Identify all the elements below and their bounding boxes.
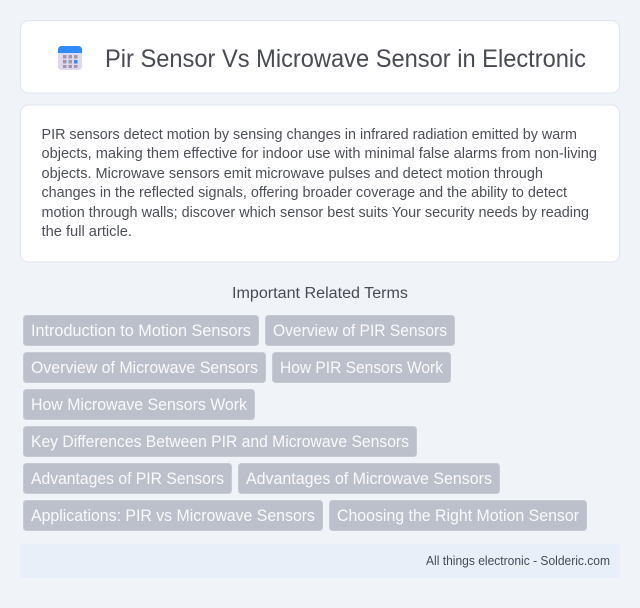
- tag: introduction: [24, 316, 258, 346]
- tag: overview of microwave: Overview of Microwave Sensors: [31, 358, 258, 377]
- tag: advantages of PIR: [24, 464, 232, 494]
- tag: advantages of PIR: Advantages of PIR Sensors: [31, 469, 224, 488]
- heading: related terms: Important Related Terms: [232, 285, 408, 302]
- tag: overview of PIR: Overview of PIR Sensors: [273, 321, 447, 340]
- text block: summary paragraph: objects, making them effective for indoor use with minimal false alarms from non-living: [42, 146, 597, 162]
- title: Pir Sensor Vs Microwave Sensor in Electronic: [105, 45, 586, 73]
- text block: summary paragraph: [42, 127, 597, 240]
- panel: related term tags: [24, 316, 586, 530]
- footer: All things electronic - Solderic.com: [426, 554, 610, 568]
- tag: introduction: Introduction to Motion Sensors: [31, 321, 251, 340]
- tag: how microwave works: [24, 390, 254, 420]
- tag: overview of PIR: [266, 316, 454, 346]
- tag: applications: [24, 500, 322, 530]
- text block: summary paragraph: objects. Microwave sensors emit microwave pulses and detect motion through: [42, 166, 543, 182]
- tag: choosing: Choosing the Right Motion Sensor: [337, 506, 579, 525]
- text block: summary paragraph: the full article.: [42, 224, 132, 240]
- tag: how PIR works: How PIR Sensors Work: [280, 358, 444, 377]
- tag: choosing: [330, 500, 586, 530]
- text block: summary paragraph: motion through walls; discover which sensor best suits Your security needs by reading: [42, 205, 589, 221]
- tag: key differences: [24, 426, 416, 456]
- panel: summary: [20, 105, 620, 262]
- tag: key differences: Key Differences Between PIR and Microwave Sensors: [31, 432, 409, 451]
- tag: advantages of microwave: Advantages of Microwave Sensors: [246, 469, 492, 488]
- tag: advantages of microwave: [238, 464, 500, 494]
- icon: calendar: [58, 46, 82, 70]
- panel: title header: [20, 20, 620, 93]
- tag: how PIR works: [272, 352, 450, 382]
- tag: how microwave works: How Microwave Sensors Work: [31, 395, 248, 414]
- text block: summary paragraph: changes in the reflected signals, offering broader coverage and the ability to detect: [42, 185, 567, 201]
- tag: overview of microwave: [24, 352, 266, 382]
- text block: summary paragraph: PIR sensors detect motion by sensing changes in infrared radiation emitted by warm: [42, 127, 577, 143]
- footer: [20, 544, 620, 578]
- tag: applications: Applications: PIR vs Microwave Sensors: [31, 506, 315, 525]
